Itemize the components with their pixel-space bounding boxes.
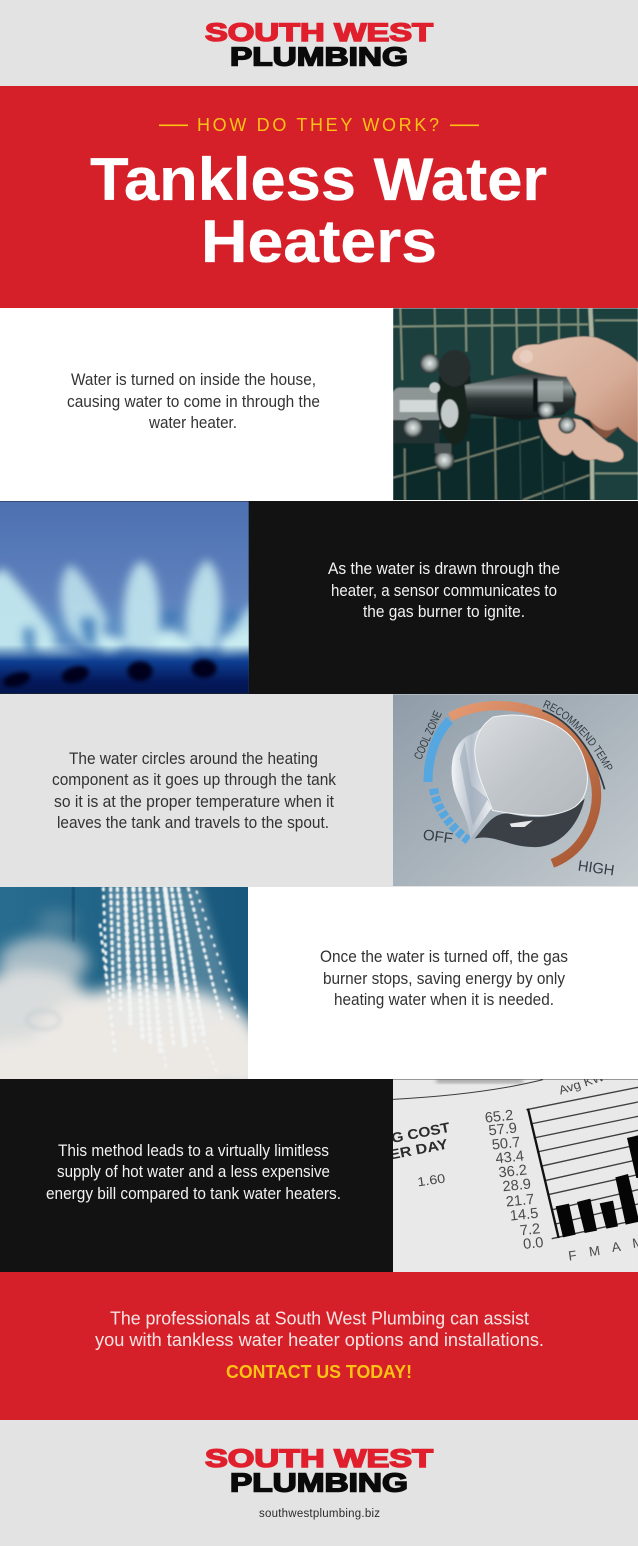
step 3 text: leaves the tank and travels to the spout. bbox=[57, 814, 329, 832]
photo: energy bill chart bbox=[393, 1079, 638, 1272]
header band bbox=[0, 0, 638, 86]
step 2 text: heater, a sensor communicates to bbox=[331, 582, 557, 600]
photo: shower and steam bbox=[0, 865, 280, 1105]
orange temperature arc bbox=[450, 706, 596, 863]
axis labels: 36.2 bbox=[498, 1162, 528, 1181]
step 1 text: Water is turned on inside the house, bbox=[71, 371, 316, 389]
panel: step 4 bbox=[0, 865, 638, 1105]
panel: step 5 bbox=[0, 1067, 638, 1278]
logo: South West Plumbing (bottom): SOUTH WEST bbox=[205, 1445, 433, 1473]
panel: step 3 bbox=[52, 694, 638, 886]
recommend underline bbox=[542, 710, 605, 789]
chart bars bbox=[556, 1135, 638, 1237]
bill text: Avg KWH bbox=[557, 1067, 615, 1098]
logo: South West Plumbing (bottom): PLUMBING bbox=[230, 1468, 408, 1498]
title panel bbox=[0, 86, 638, 308]
axis labels: 50.7 bbox=[491, 1135, 521, 1154]
footer panel bbox=[0, 1420, 638, 1546]
water streaks bbox=[100, 888, 238, 1072]
panel: step 1 bbox=[0, 305, 638, 505]
contact us heading: CONTACT US TODAY! bbox=[226, 1362, 412, 1382]
call to action text: you with tankless water heater options and installations. bbox=[95, 1330, 544, 1350]
dial labels bbox=[414, 700, 614, 876]
axis labels: 57.9 bbox=[488, 1120, 518, 1139]
axis labels: 21.7 bbox=[505, 1192, 535, 1211]
step 2 text: the gas burner to ignite. bbox=[363, 603, 525, 621]
blue cool-zone arc bbox=[428, 720, 468, 840]
step 1 text bbox=[67, 371, 320, 432]
logo: South West Plumbing (top): PLUMBING bbox=[230, 42, 408, 72]
axis labels: 0.0 bbox=[522, 1235, 544, 1253]
step 4 text: Once the water is turned off, the gas bbox=[320, 948, 568, 966]
axis labels bbox=[484, 1108, 638, 1264]
main title: Heaters bbox=[201, 208, 437, 275]
logo: South West Plumbing (top) bbox=[205, 19, 433, 72]
water haze bbox=[107, 885, 240, 1025]
step 5 text: This method leads to a virtually limitless bbox=[58, 1142, 329, 1160]
axis labels: 14.5 bbox=[509, 1206, 539, 1225]
website address: southwestplumbing.biz bbox=[259, 1508, 380, 1520]
eyebrow heading: HOW DO THEY WORK? bbox=[197, 115, 439, 135]
logo: South West Plumbing (top): SOUTH WEST bbox=[205, 19, 433, 47]
bill text: G COST bbox=[390, 1119, 452, 1146]
panel: call to action bbox=[0, 1272, 638, 1420]
axis labels: 65.2 bbox=[484, 1108, 514, 1127]
step 1 text: water heater. bbox=[148, 414, 237, 432]
photo: blue gas flames bbox=[0, 501, 249, 694]
call to action text: The professionals at South West Plumbing can assist bbox=[110, 1308, 529, 1328]
call to action text bbox=[95, 1308, 544, 1350]
photo: temperature dial bbox=[393, 694, 638, 886]
chrome knob bbox=[452, 715, 587, 847]
step 2 text bbox=[328, 560, 560, 621]
photo: hand turning tap bbox=[393, 305, 638, 505]
dial labels: HIGH bbox=[577, 857, 615, 879]
logo: South West Plumbing (bottom) bbox=[205, 1445, 433, 1498]
axis labels: F bbox=[567, 1248, 577, 1264]
hand bbox=[513, 336, 638, 462]
axis labels: 28.9 bbox=[502, 1176, 532, 1195]
panel: step 2 bbox=[0, 501, 638, 694]
step 3 text: so it is at the proper temperature when it bbox=[54, 793, 334, 811]
step 5 text: energy bill compared to tank water heaters. bbox=[46, 1185, 341, 1203]
main title: Tankless Water bbox=[90, 146, 547, 213]
axis labels: M bbox=[588, 1243, 601, 1259]
step 3 text bbox=[52, 750, 337, 832]
grid lines bbox=[526, 1087, 638, 1239]
bill text: ER DAY bbox=[388, 1135, 450, 1163]
step 1 text: causing water to come in through the bbox=[67, 393, 320, 411]
steam cloud bbox=[0, 905, 248, 1079]
dial labels: OFF bbox=[422, 826, 454, 847]
dial labels: COOL ZONE bbox=[411, 709, 445, 762]
step 3 text: The water circles around the heating bbox=[69, 750, 318, 768]
tap body bbox=[393, 350, 576, 470]
dial labels: RECOMMEND TEMP bbox=[543, 700, 612, 770]
step 5 text bbox=[46, 1142, 341, 1203]
bill text bbox=[388, 1067, 615, 1189]
main title bbox=[90, 146, 547, 275]
bill text: 1.60 bbox=[416, 1172, 446, 1189]
step 4 text: heating water when it is needed. bbox=[334, 991, 554, 1009]
step 2 text: As the water is drawn through the bbox=[328, 560, 560, 578]
step 4 text: burner stops, saving energy by only bbox=[323, 970, 566, 988]
axis labels: A bbox=[611, 1239, 622, 1255]
step 3 text: component as it goes up through the tank bbox=[52, 771, 337, 789]
step 4 text bbox=[320, 948, 568, 1009]
axis labels: 7.2 bbox=[519, 1221, 541, 1239]
step 5 text: supply of hot water and a less expensive bbox=[57, 1163, 330, 1181]
axis labels: 43.4 bbox=[495, 1148, 525, 1167]
